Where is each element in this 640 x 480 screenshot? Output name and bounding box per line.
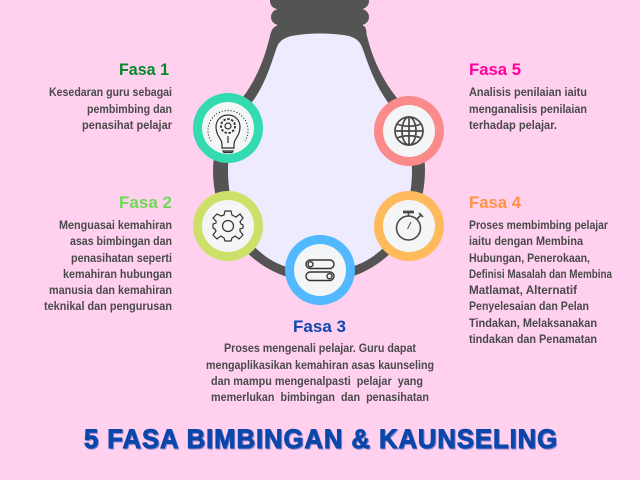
text block: Fasa 5: Analisis penilaian iaitu	[469, 85, 587, 99]
light bulb outline	[213, 0, 425, 282]
title: 5 FASA BIMBINGAN & KAUNSELING	[84, 423, 557, 454]
text block: Fasa 3: Proses mengenali pelajar. Guru dapat	[224, 341, 416, 355]
text block: Fasa 5: terhadap pelajar.	[469, 118, 557, 132]
heading: Fasa 3: Fasa 3	[293, 318, 346, 336]
text block: Fasa 5: menganalisis penilaian	[469, 102, 587, 116]
text block: Fasa 4: iaitu dengan Membina	[469, 234, 583, 248]
text block: Fasa 2: Menguasai kemahiran	[59, 218, 172, 232]
text block: Fasa 3: memerlukan bimbingan dan penasihatan	[211, 390, 429, 404]
text block: Fasa 4: Matlamat, Alternatif	[469, 283, 577, 297]
text block: Fasa 3: dan mampu mengenalpasti pelajar yang	[211, 374, 423, 388]
heading: Fasa 5: Fasa 5	[469, 61, 521, 79]
text block: Fasa 4: Definisi Masalah dan Membina	[469, 267, 612, 281]
text block: Fasa 4: Hubungan, Penerokaan,	[469, 251, 590, 265]
text block: Fasa 2: manusia dan kemahiran	[49, 283, 172, 297]
text block: Fasa 4: Penyelesaian dan Pelan	[469, 299, 589, 313]
icon circle: gear	[193, 191, 263, 261]
text block: Fasa 1	[49, 85, 172, 132]
text block: Fasa 3	[206, 341, 434, 404]
text block: Fasa 1: pembimbing dan	[87, 102, 172, 116]
icon circle: globe	[374, 96, 444, 166]
text block: Fasa 1: Kesedaran guru sebagai	[49, 85, 172, 99]
text block: Fasa 4: tindakan dan Penamatan	[469, 332, 597, 346]
icon circle: toggle switches	[285, 235, 355, 305]
heading: Fasa 1: Fasa 1	[119, 61, 169, 79]
icon circle: stopwatch	[374, 191, 444, 261]
icon circle: bulb with gear	[193, 93, 263, 163]
text block: Fasa 2: asas bimbingan dan	[70, 234, 172, 248]
text block: Fasa 2: penasihatan seperti	[71, 251, 172, 265]
text block: Fasa 4	[469, 218, 612, 346]
text block: Fasa 5	[469, 85, 587, 132]
title: 5 FASA BIMBINGAN & KAUNSELING	[85, 424, 558, 455]
text block: Fasa 4: Proses membimbing pelajar	[469, 218, 608, 232]
heading: Fasa 4: Fasa 4	[469, 194, 522, 212]
text block: Fasa 2: teknikal dan pengurusan	[44, 299, 172, 313]
text block: Fasa 2: kemahiran hubungan	[63, 267, 172, 281]
text block: Fasa 4: Tindakan, Melaksanakan	[469, 316, 597, 330]
heading: Fasa 2: Fasa 2	[119, 194, 172, 212]
text block: Fasa 3: mengaplikasikan kemahiran asas kaunseling	[206, 358, 434, 372]
text block: Fasa 2	[44, 218, 172, 313]
text block: Fasa 1: penasihat pelajar	[82, 118, 172, 132]
